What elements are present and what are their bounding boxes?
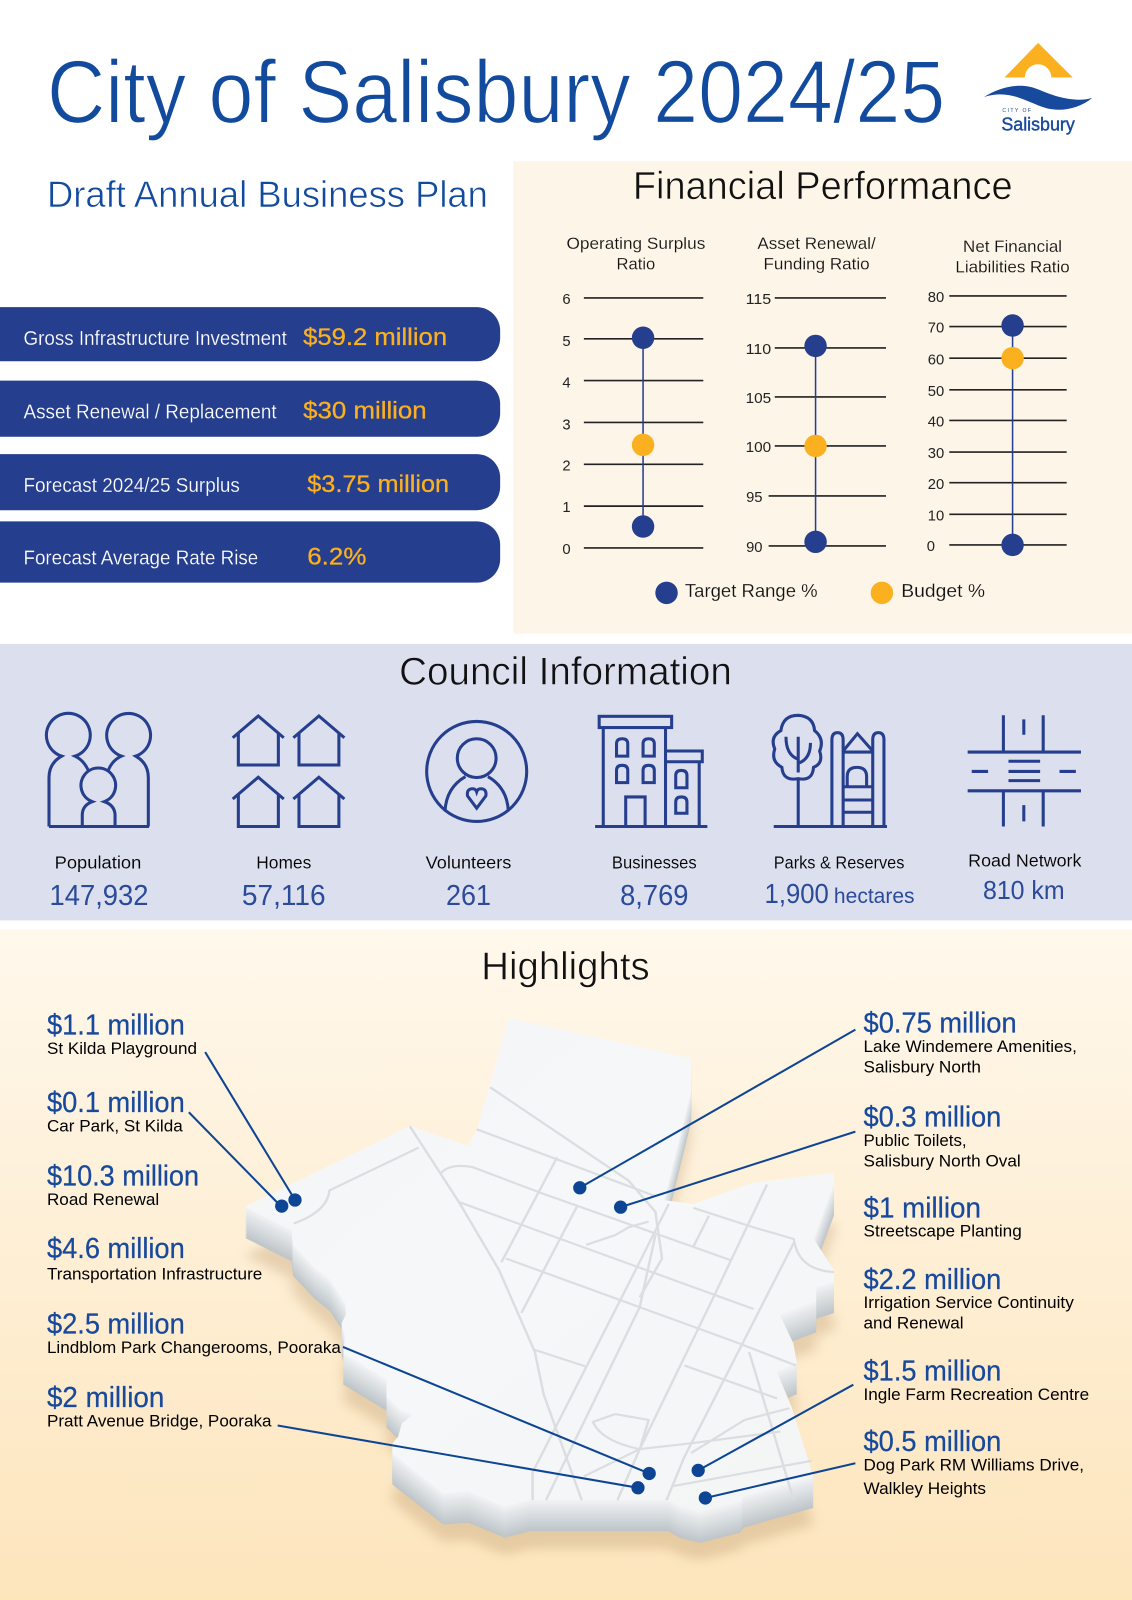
chart: operating surplus ratio: 0: [562, 542, 571, 558]
highlight: Public Toilets: [864, 1102, 1021, 1170]
pill: forecast rate rise: 6.2%: [307, 543, 366, 570]
title: City of Salisbury 2024/25: [47, 42, 945, 141]
icon: businesses: [595, 716, 707, 827]
heading: highlights: Highlights: [481, 946, 650, 989]
chart: asset renewal funding ratio: 110: [746, 342, 771, 358]
highlight: Lake Windemere: [864, 1008, 1077, 1076]
stat: road network: 810 km: [983, 877, 1065, 905]
pill: forecast surplus: $3.75 million: [307, 471, 449, 498]
highlight: Pratt Avenue Bridge: Pratt Avenue Bridge, Pooraka: [47, 1413, 272, 1431]
highlight: Pratt Avenue Bridge: $2 million: [47, 1382, 164, 1414]
panel: financial performance: [513, 161, 1132, 634]
chart: net financial liabilities ratio: 40: [928, 415, 944, 431]
legend: [655, 580, 985, 604]
highlight: Transportation Infrastructure: $4.6 million: [47, 1233, 185, 1265]
panel: key figures: [0, 307, 500, 583]
chart: net financial liabilities ratio: Net Financial: [963, 238, 1062, 256]
pill: forecast rate rise: [0, 521, 500, 583]
stat: parks and reserves: hectares: [834, 884, 915, 908]
highlight: Transportation Infrastructure: [47, 1233, 262, 1284]
highlight: Dog Park: $0.5 million: [864, 1426, 1001, 1458]
heading: council information: Council Information: [399, 651, 732, 694]
highlight: Lindblom Park: Lindblom Park Changerooms, Pooraka: [47, 1339, 342, 1357]
chart: operating surplus ratio: 4: [562, 376, 571, 392]
highlight: Public Toilets: Public Toilets,: [864, 1132, 967, 1150]
highlight: Irrigation Service: Irrigation Service Continuity: [864, 1294, 1075, 1312]
stat: population: [50, 852, 149, 912]
highlight: Ingle Farm: Ingle Farm Recreation Centre: [864, 1386, 1089, 1404]
highlight: Streetscape Planting: $1 million: [864, 1192, 981, 1224]
highlight: Irrigation Service: [864, 1264, 1075, 1333]
highlight: Car Park: $0.1 million: [47, 1087, 185, 1119]
heading: financial performance: Financial Performance: [633, 165, 1013, 208]
stat: road network: Road Network: [968, 850, 1082, 870]
highlight: Dog Park: Walkley Heights: [864, 1480, 986, 1498]
icon: volunteers: [427, 721, 527, 821]
stat: parks and reserves: Parks & Reserves: [774, 852, 905, 872]
legend: Target Range %: [685, 580, 818, 601]
pill: gross infrastructure investment: Gross Infrastructure Investment: [23, 328, 287, 350]
chart: asset renewal funding ratio: 90: [746, 540, 763, 556]
pill: forecast surplus: Forecast 2024/25 Surplus: [23, 475, 240, 497]
highlight: Road Renewal: Road Renewal: [47, 1191, 159, 1209]
chart: operating surplus ratio: 5: [562, 334, 571, 350]
icon: population: [46, 713, 151, 827]
stat: population: 147,932: [50, 880, 149, 912]
stat: road network: [968, 850, 1082, 905]
chart: operating surplus ratio: [562, 235, 705, 558]
chart: asset renewal funding ratio: 100: [746, 440, 771, 456]
stat: businesses: 8,769: [620, 880, 688, 912]
highlight: Ingle Farm: $1.5 million: [864, 1356, 1001, 1388]
pill: gross infrastructure investment: $59.2 million: [303, 324, 447, 351]
icon: parks and reserves: [773, 715, 887, 827]
stat: homes: Homes: [256, 852, 312, 872]
panel: highlights: [0, 930, 1132, 1600]
chart: net financial liabilities ratio: 70: [928, 321, 944, 337]
highlight: Lindblom Park: [47, 1309, 342, 1357]
highlight: Streetscape Planting: Streetscape Planting: [864, 1223, 1022, 1241]
logo: City of Salisbury: CITY OF: [1002, 108, 1032, 114]
chart: operating surplus ratio: 3: [562, 418, 571, 434]
stat: parks and reserves: [765, 852, 915, 909]
highlight: Pratt Avenue Bridge: [47, 1382, 272, 1431]
chart: net financial liabilities ratio: Liabilities Ratio: [955, 258, 1070, 276]
stat: population: Population: [55, 852, 141, 872]
pill: forecast surplus: [0, 454, 500, 510]
highlight: Irrigation Service: and Renewal: [864, 1315, 964, 1333]
highlight: Irrigation Service: $2.2 million: [864, 1264, 1001, 1296]
highlight: St Kilda Playground: [47, 1010, 197, 1058]
chart: net financial liabilities ratio: 20: [928, 477, 944, 493]
chart: operating surplus ratio: 6: [562, 292, 571, 308]
highlight: Dog Park: Dog Park RM Williams Drive,: [864, 1456, 1084, 1474]
stat: businesses: Businesses: [612, 852, 697, 872]
highlight: Lindblom Park: $2.5 million: [47, 1309, 185, 1341]
legend: Budget %: [901, 580, 985, 601]
highlight: Dog Park: [864, 1426, 1084, 1498]
pill: forecast rate rise: Forecast Average Rate Rise: [23, 547, 258, 569]
icon: road network: [968, 715, 1081, 827]
highlight: Transportation Infrastructure: Transportation Infrastructure: [47, 1266, 262, 1284]
stat: homes: [242, 852, 326, 912]
stat: volunteers: Volunteers: [426, 852, 512, 872]
highlight: Lake Windemere: $0.75 million: [864, 1008, 1017, 1040]
chart: net financial liabilities ratio: 0: [927, 539, 935, 555]
chart: net financial liabilities ratio: [927, 238, 1070, 556]
highlight: Road Renewal: [47, 1161, 199, 1209]
stat: homes: 57,116: [242, 880, 326, 912]
highlight: Lake Windemere: Lake Windemere Amenities,: [864, 1038, 1077, 1056]
chart: net financial liabilities ratio: 50: [928, 384, 944, 400]
highlight: Road Renewal: $10.3 million: [47, 1161, 199, 1193]
highlight: Streetscape Planting: [864, 1192, 1022, 1241]
map of Salisbury: [245, 1018, 834, 1560]
stat: businesses: [612, 852, 697, 912]
highlight: St Kilda Playground: St Kilda Playground: [47, 1040, 197, 1058]
chart: operating surplus ratio: 2: [562, 458, 571, 474]
chart: asset renewal funding ratio: [746, 235, 886, 556]
chart: operating surplus ratio: Operating Surplus: [567, 235, 705, 253]
chart: operating surplus ratio: Ratio: [617, 255, 655, 273]
chart: asset renewal funding ratio: 95: [746, 490, 763, 506]
stat: parks and reserves: 1,900: [765, 878, 829, 909]
pill: asset renewal: [0, 381, 500, 437]
chart: asset renewal funding ratio: 105: [746, 391, 771, 407]
subtitle: Draft Annual Business Plan: [47, 174, 488, 215]
chart: net financial liabilities ratio: 10: [928, 508, 944, 524]
chart: asset renewal funding ratio: 115: [746, 292, 771, 308]
chart: net financial liabilities ratio: 30: [928, 446, 944, 462]
panel: council information: [0, 644, 1132, 920]
stat: volunteers: [426, 852, 512, 912]
highlight: Lake Windemere: Salisbury North: [864, 1058, 981, 1076]
leader lines and map markers: [189, 1030, 855, 1505]
chart: net financial liabilities ratio: 60: [928, 352, 944, 368]
chart: asset renewal funding ratio: Funding Ratio: [764, 255, 870, 273]
highlight: Public Toilets: $0.3 million: [864, 1102, 1001, 1134]
highlight: Car Park: [47, 1087, 185, 1136]
logo: City of Salisbury: [984, 43, 1092, 136]
highlight: St Kilda Playground: $1.1 million: [47, 1010, 185, 1042]
icon: homes: [233, 716, 344, 827]
stat: volunteers: 261: [446, 880, 491, 912]
chart: operating surplus ratio: 1: [562, 500, 571, 516]
chart: asset renewal funding ratio: Asset Renewal/: [757, 235, 876, 253]
highlight: Public Toilets: Salisbury North Oval: [864, 1152, 1021, 1170]
pill: asset renewal: Asset Renewal / Replacement: [23, 401, 277, 423]
pill: gross infrastructure investment: [0, 307, 500, 361]
logo: City of Salisbury: Salisbury: [1001, 115, 1075, 136]
pill: asset renewal: $30 million: [303, 397, 427, 424]
chart: net financial liabilities ratio: 80: [928, 290, 944, 306]
highlight: Ingle Farm: [864, 1356, 1089, 1404]
highlight: Car Park: Car Park, St Kilda: [47, 1118, 184, 1136]
